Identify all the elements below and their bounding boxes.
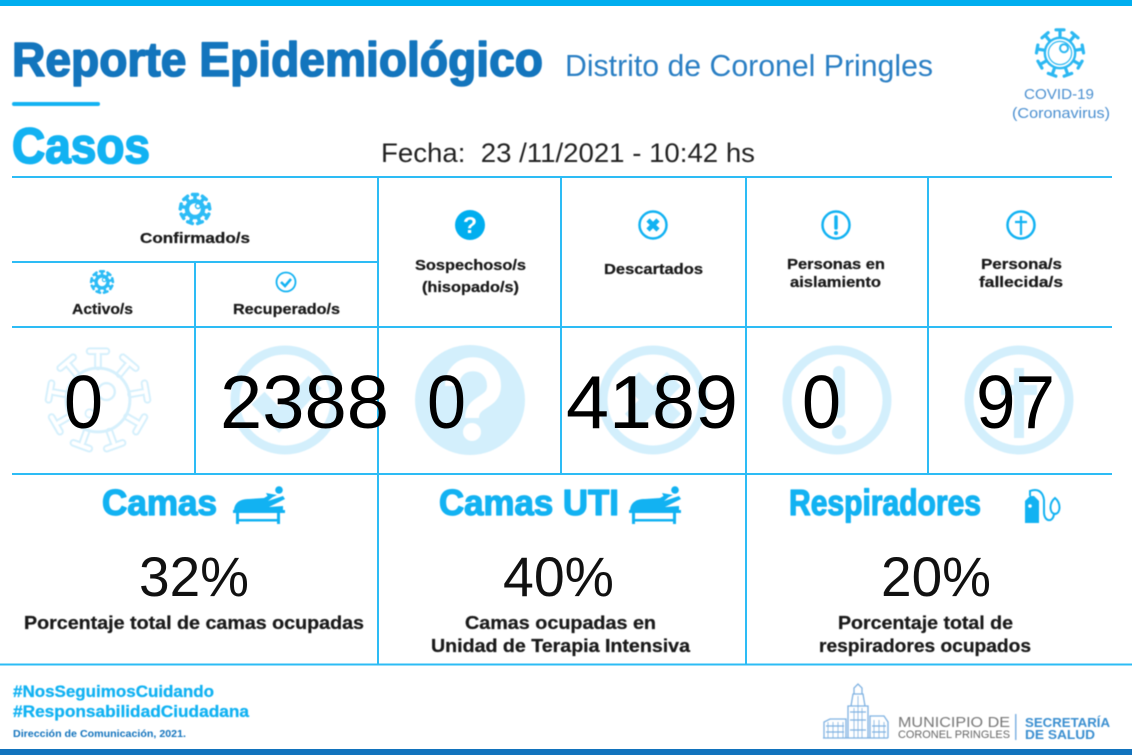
icon: check <box>276 272 296 292</box>
number: activos: 0 <box>64 360 103 444</box>
number: sospechosos: 0 <box>427 360 466 444</box>
label: confirmado: Confirmado/s <box>140 230 250 247</box>
credit: Dirección de Comunicación, 2021. <box>13 729 186 740</box>
icon: cross <box>640 212 666 238</box>
heading: camas: Camas <box>102 482 217 523</box>
bottom bar <box>0 749 1132 755</box>
label: sospechoso: Sospechoso/s <box>415 257 526 274</box>
icon: question: ? <box>463 212 477 238</box>
panel: respiradores <box>789 482 1060 656</box>
case counts <box>64 360 1055 444</box>
label: descartados: Descartados <box>604 261 703 278</box>
description: respiradores line 2: respiradores ocupados <box>819 635 1031 656</box>
logo text: municipio: MUNICIPIO DE <box>898 714 1010 731</box>
percent: respiradores: 20% <box>881 545 991 608</box>
label: persona: Persona/s <box>981 256 1062 273</box>
heading: respiradores: Respiradores <box>789 482 981 523</box>
header <box>12 30 1110 174</box>
column: activos <box>72 271 133 318</box>
column: aislamiento <box>787 212 885 291</box>
top bar <box>0 0 1132 6</box>
column: confirmados <box>140 194 250 247</box>
panel: camas <box>24 482 364 633</box>
percent: camas uti: 40% <box>503 545 614 608</box>
watermark: cross <box>603 350 703 450</box>
title: Reporte Epidemiológico <box>12 34 543 87</box>
icon: dagger cross <box>1008 212 1034 238</box>
icon: virus <box>180 194 210 223</box>
hashtag 2: #ResponsabilidadCiudadana <box>13 702 250 721</box>
watermark: cross of remembrance <box>969 350 1069 450</box>
description: respiradores line 1: Porcentaje total de <box>838 612 1013 633</box>
column: descartados <box>604 212 703 278</box>
column: fallecidos <box>979 212 1063 291</box>
table grid <box>0 177 1132 664</box>
number: descartados: 4189 <box>566 360 738 444</box>
watermark icons <box>49 345 1069 455</box>
description: camas uti line 2: Unidad de Terapia Intensiva <box>431 635 691 656</box>
logo divider <box>1015 714 1016 740</box>
covid badge <box>1024 30 1094 103</box>
icon: active virus <box>91 271 113 293</box>
watermark: virus <box>49 351 147 449</box>
logo text: secretaria: SECRETARÍA <box>1025 715 1111 730</box>
logo text: de salud: DE SALUD <box>1025 727 1095 742</box>
icon: oxygen tank <box>1025 490 1060 523</box>
watermark: check <box>235 350 335 450</box>
icon: municipal building <box>823 684 888 738</box>
description: camas uti line 1: Camas ocupadas en <box>465 612 656 633</box>
label: recuperado: Recuperado/s <box>233 301 340 318</box>
number: aislamiento: 0 <box>802 360 841 444</box>
label: hisopado: (hisopado/s) <box>422 279 519 296</box>
watermark: exclamation <box>787 350 887 450</box>
number: fallecidos: 97 <box>976 360 1055 444</box>
label: aislamiento: aislamiento <box>790 274 881 291</box>
date: Fecha: 23 /11/2021 - 10:42 hs <box>381 138 755 168</box>
icon: bed uti <box>629 486 681 524</box>
label: fallecida: fallecida/s <box>979 274 1063 291</box>
percent: camas: 32% <box>139 545 249 608</box>
badge label: COVID-19 <box>1024 86 1094 103</box>
column: recuperados <box>233 272 340 318</box>
label: activo: Activo/s <box>72 301 133 318</box>
column: sospechosos <box>415 210 526 296</box>
footer <box>13 682 1111 742</box>
icon: exclamation <box>822 212 850 238</box>
badge sublabel: (Coronavirus) <box>1012 105 1110 122</box>
watermark: question <box>415 345 525 455</box>
subtitle: Distrito de Coronel Pringles <box>565 48 933 83</box>
description: camas: Porcentaje total de camas ocupadas <box>24 612 364 633</box>
icon: coronavirus <box>1036 30 1084 76</box>
panel: camas uti <box>431 482 691 656</box>
logo text: coronel pringles: CORONEL PRINGLES <box>898 729 1010 741</box>
heading underline <box>12 102 100 106</box>
heading: camas uti: Camas UTI <box>439 482 619 523</box>
section heading: casos: Casos <box>12 118 150 174</box>
icon: bed <box>233 486 285 524</box>
number: recuperados: 2388 <box>220 360 389 444</box>
label: personas en: Personas en <box>787 256 885 273</box>
column headers <box>72 194 1063 318</box>
hashtag 1: #NosSeguimosCuidando <box>13 682 214 701</box>
